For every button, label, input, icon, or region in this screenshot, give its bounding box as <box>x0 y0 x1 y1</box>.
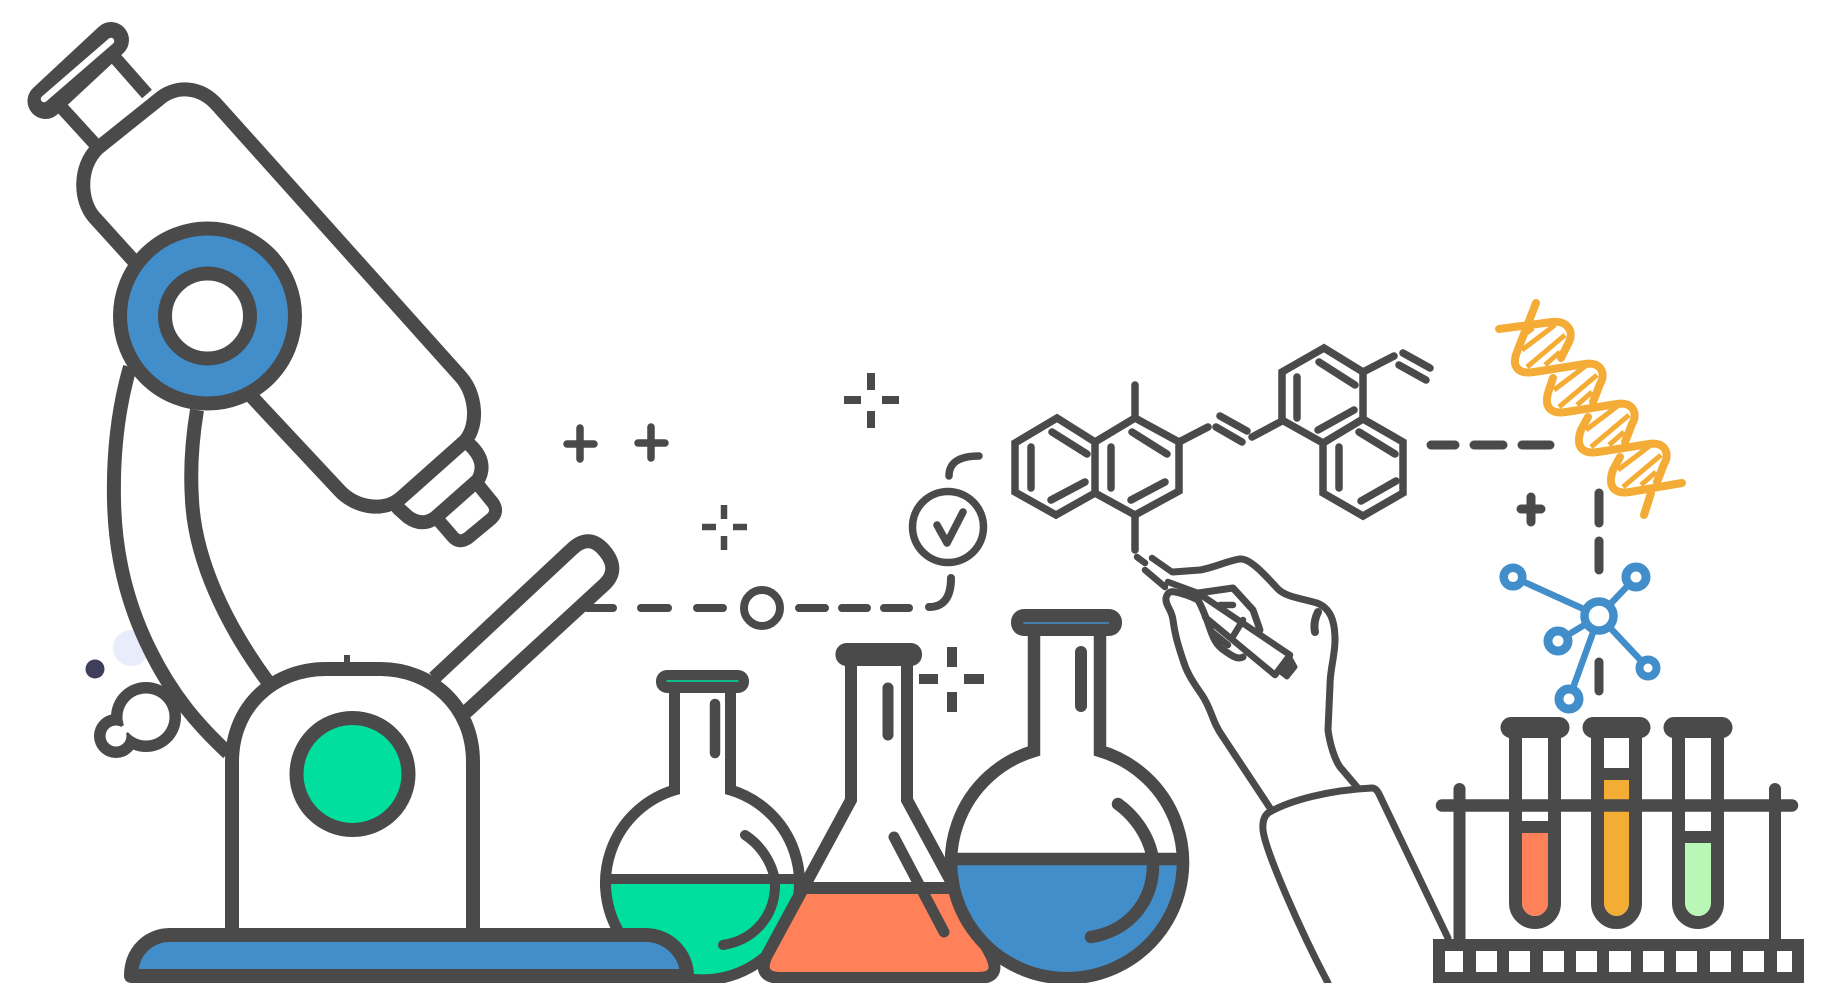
base plate <box>131 935 687 976</box>
dashed connector right <box>1431 445 1599 691</box>
hand outline <box>1166 592 1270 808</box>
objective lens upper <box>398 445 482 522</box>
pen <box>1137 557 1290 675</box>
icon: cloud bubbles <box>94 682 181 758</box>
pedestal <box>232 655 473 940</box>
liquid levels <box>1522 774 1711 837</box>
microscope <box>44 40 687 976</box>
icon: blue molecule <box>1504 567 1656 709</box>
icon: sparkle flasks <box>919 647 984 712</box>
chemical structure <box>1015 348 1430 550</box>
icon: plus signs <box>567 427 665 459</box>
icon: plus right <box>1521 497 1541 522</box>
tube fills <box>1522 738 1711 916</box>
tube lips <box>1511 717 1722 738</box>
icon: sparkle small <box>702 505 747 550</box>
rack uprights <box>1460 789 1775 945</box>
stage slider arm <box>434 541 612 712</box>
icon: small dot <box>86 660 104 678</box>
hexagon rings <box>1015 418 1095 515</box>
flask: green round-bottom <box>605 670 800 980</box>
eyepiece neck <box>52 52 147 143</box>
tube walls <box>1516 727 1718 922</box>
sleeve <box>1263 788 1448 983</box>
dashed connector left <box>587 578 951 626</box>
objective lens lower <box>440 487 496 541</box>
icon: DNA helix <box>1499 303 1682 515</box>
inner bonds <box>1031 362 1396 501</box>
test tube rack <box>1433 727 1804 983</box>
flask: blue round-bottom <box>950 609 1183 978</box>
focus ring <box>120 228 295 404</box>
rack base <box>1433 939 1804 983</box>
icon: sparkle large <box>844 373 899 428</box>
hand with pen <box>1137 557 1448 983</box>
eyepiece cap <box>44 40 111 101</box>
microscope tube <box>83 89 474 507</box>
arm curves <box>114 367 268 753</box>
rack bar <box>1442 799 1792 812</box>
icon: check circle <box>912 456 984 562</box>
flask: orange erlenmeyer <box>764 643 994 978</box>
icon: pale bubble <box>113 630 149 666</box>
side bonds <box>1135 353 1430 550</box>
